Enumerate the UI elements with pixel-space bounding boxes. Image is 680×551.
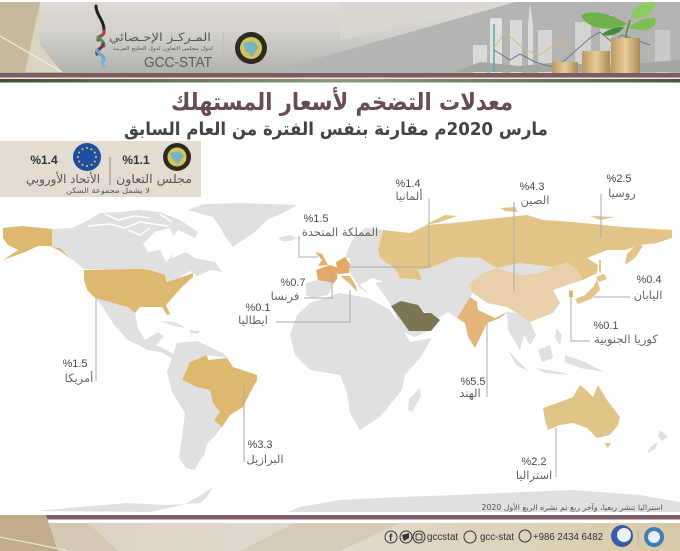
icon: EU flag [73,143,101,171]
footnote: استراليا تنشر ربعيا، وآخر ربع تم نشره الربع الأول 2020 [482,502,662,512]
title: معدلات التضخم لأسعار المستهلك [171,87,513,116]
South Korea [569,290,573,297]
subtitle: مارس 2020م مقارنة بنفس الفترة من العام السابق [124,119,548,140]
footer social and contact: gcc-stat [480,532,514,543]
label: Russia: روسيا [608,186,636,201]
Canadian Arctic channels [88,214,172,235]
label: France: فرنسا [271,289,299,304]
label: Japan [594,274,662,302]
label: Australia: استراليا [516,468,552,483]
Indonesia and Philippines [508,328,604,375]
header skyline and chart [455,3,680,73]
India [457,297,510,348]
GCC value: %1.1 [122,153,150,167]
label: United Kingdom: المملكة المتحدة [302,225,378,239]
Spain [306,280,334,298]
label: Brazil: البرازيل [246,452,284,467]
GCC-STAT wordmark: المـركـز الإحـصائي [109,30,211,45]
Brazil [182,355,257,427]
Antarctica [37,487,213,512]
GCC-STAT wordmark [109,30,223,71]
label: Italy: ايطاليا [238,313,268,327]
China [468,262,583,322]
Tasmania [604,443,611,448]
New Zealand [647,430,668,453]
Southeast Asia [507,312,536,350]
Mongolia [497,263,553,275]
label: South Korea [571,296,658,347]
GCC emblem [235,32,267,64]
label: USA [62,298,96,386]
label: Russia [601,173,636,238]
label: Italy [238,290,350,327]
Arabia south [392,307,430,337]
GCC-STAT ribbon logo [96,6,104,67]
EU name: الأتحاد الأوروبي [26,171,100,187]
label: South Korea: كوريا الجنوبية [594,332,658,347]
label: China [514,181,549,291]
header coin stacks [552,38,640,73]
icon: GCC emblem [163,143,191,171]
legend panel: GCC and EU [0,141,201,197]
label: South Korea: %0.1 [593,320,619,332]
Saudi Arabia [391,301,440,331]
label: Australia [516,428,556,483]
label: USA: أمريكا [65,370,93,386]
label: Italy: %0.1 [245,302,271,314]
GCC-STAT wordmark: GCC-STAT [144,54,212,71]
GCC-STAT wordmark: لدول مجلس التعاون لدول الخليج العربية [113,46,214,52]
Italy [340,276,357,292]
label: Brazil: %3.3 [247,439,273,451]
Canada [52,210,222,282]
UK [315,252,328,266]
world map [3,203,680,512]
Iceland [278,235,297,241]
Japan [575,260,607,304]
footer certification logos [611,525,664,547]
label: Australia: %2.2 [521,456,547,468]
label: India [459,323,487,400]
Eastern Europe and Scandinavia [345,228,400,295]
label: Japan: %0.4 [636,274,662,286]
South America [167,341,228,470]
footer social and contact: +986 2434 6482 [533,532,603,543]
footer social and contact [385,530,603,544]
label: India: الهند [459,386,481,400]
label: Germany: ألمانيا [395,188,423,203]
legend note: لا يشمل مجموعة السكن [66,186,150,195]
EU value: %1.4 [30,153,58,167]
Madagascar [408,388,421,412]
Greenland [187,203,297,247]
label: Russia: %2.5 [606,173,632,185]
Africa [290,293,432,430]
footer social and contact: gccstat [427,532,458,543]
Germany [336,257,350,274]
Australia [543,385,620,438]
label: Brazil [244,384,284,467]
label: Germany [348,178,429,267]
label: USA: %1.5 [62,358,88,370]
label: Germany: %1.4 [395,178,421,190]
Russian Arctic islands [425,207,615,225]
label: United Kingdom: %1.5 [303,213,329,225]
GCC name: مجلس التعاون [116,172,192,187]
Alaska [3,226,72,260]
USA [84,269,193,315]
header plant [581,2,656,38]
label: India: %5.5 [460,376,486,388]
label: Japan: اليابان [634,288,662,302]
label: France [271,275,332,304]
France [316,265,338,283]
footer social and contact: f [389,533,393,544]
label: France: %0.7 [280,277,306,289]
header banner [0,2,680,82]
label: United Kingdom [299,213,378,257]
Kamchatka [625,244,643,265]
label: China: الصين [521,193,549,208]
Caribbean [160,321,200,334]
footer band [0,515,680,551]
Mexico and Central America [96,298,178,358]
label: China: %4.3 [519,181,545,193]
Middle East and Central Asia [375,257,497,318]
Russia [378,215,672,280]
